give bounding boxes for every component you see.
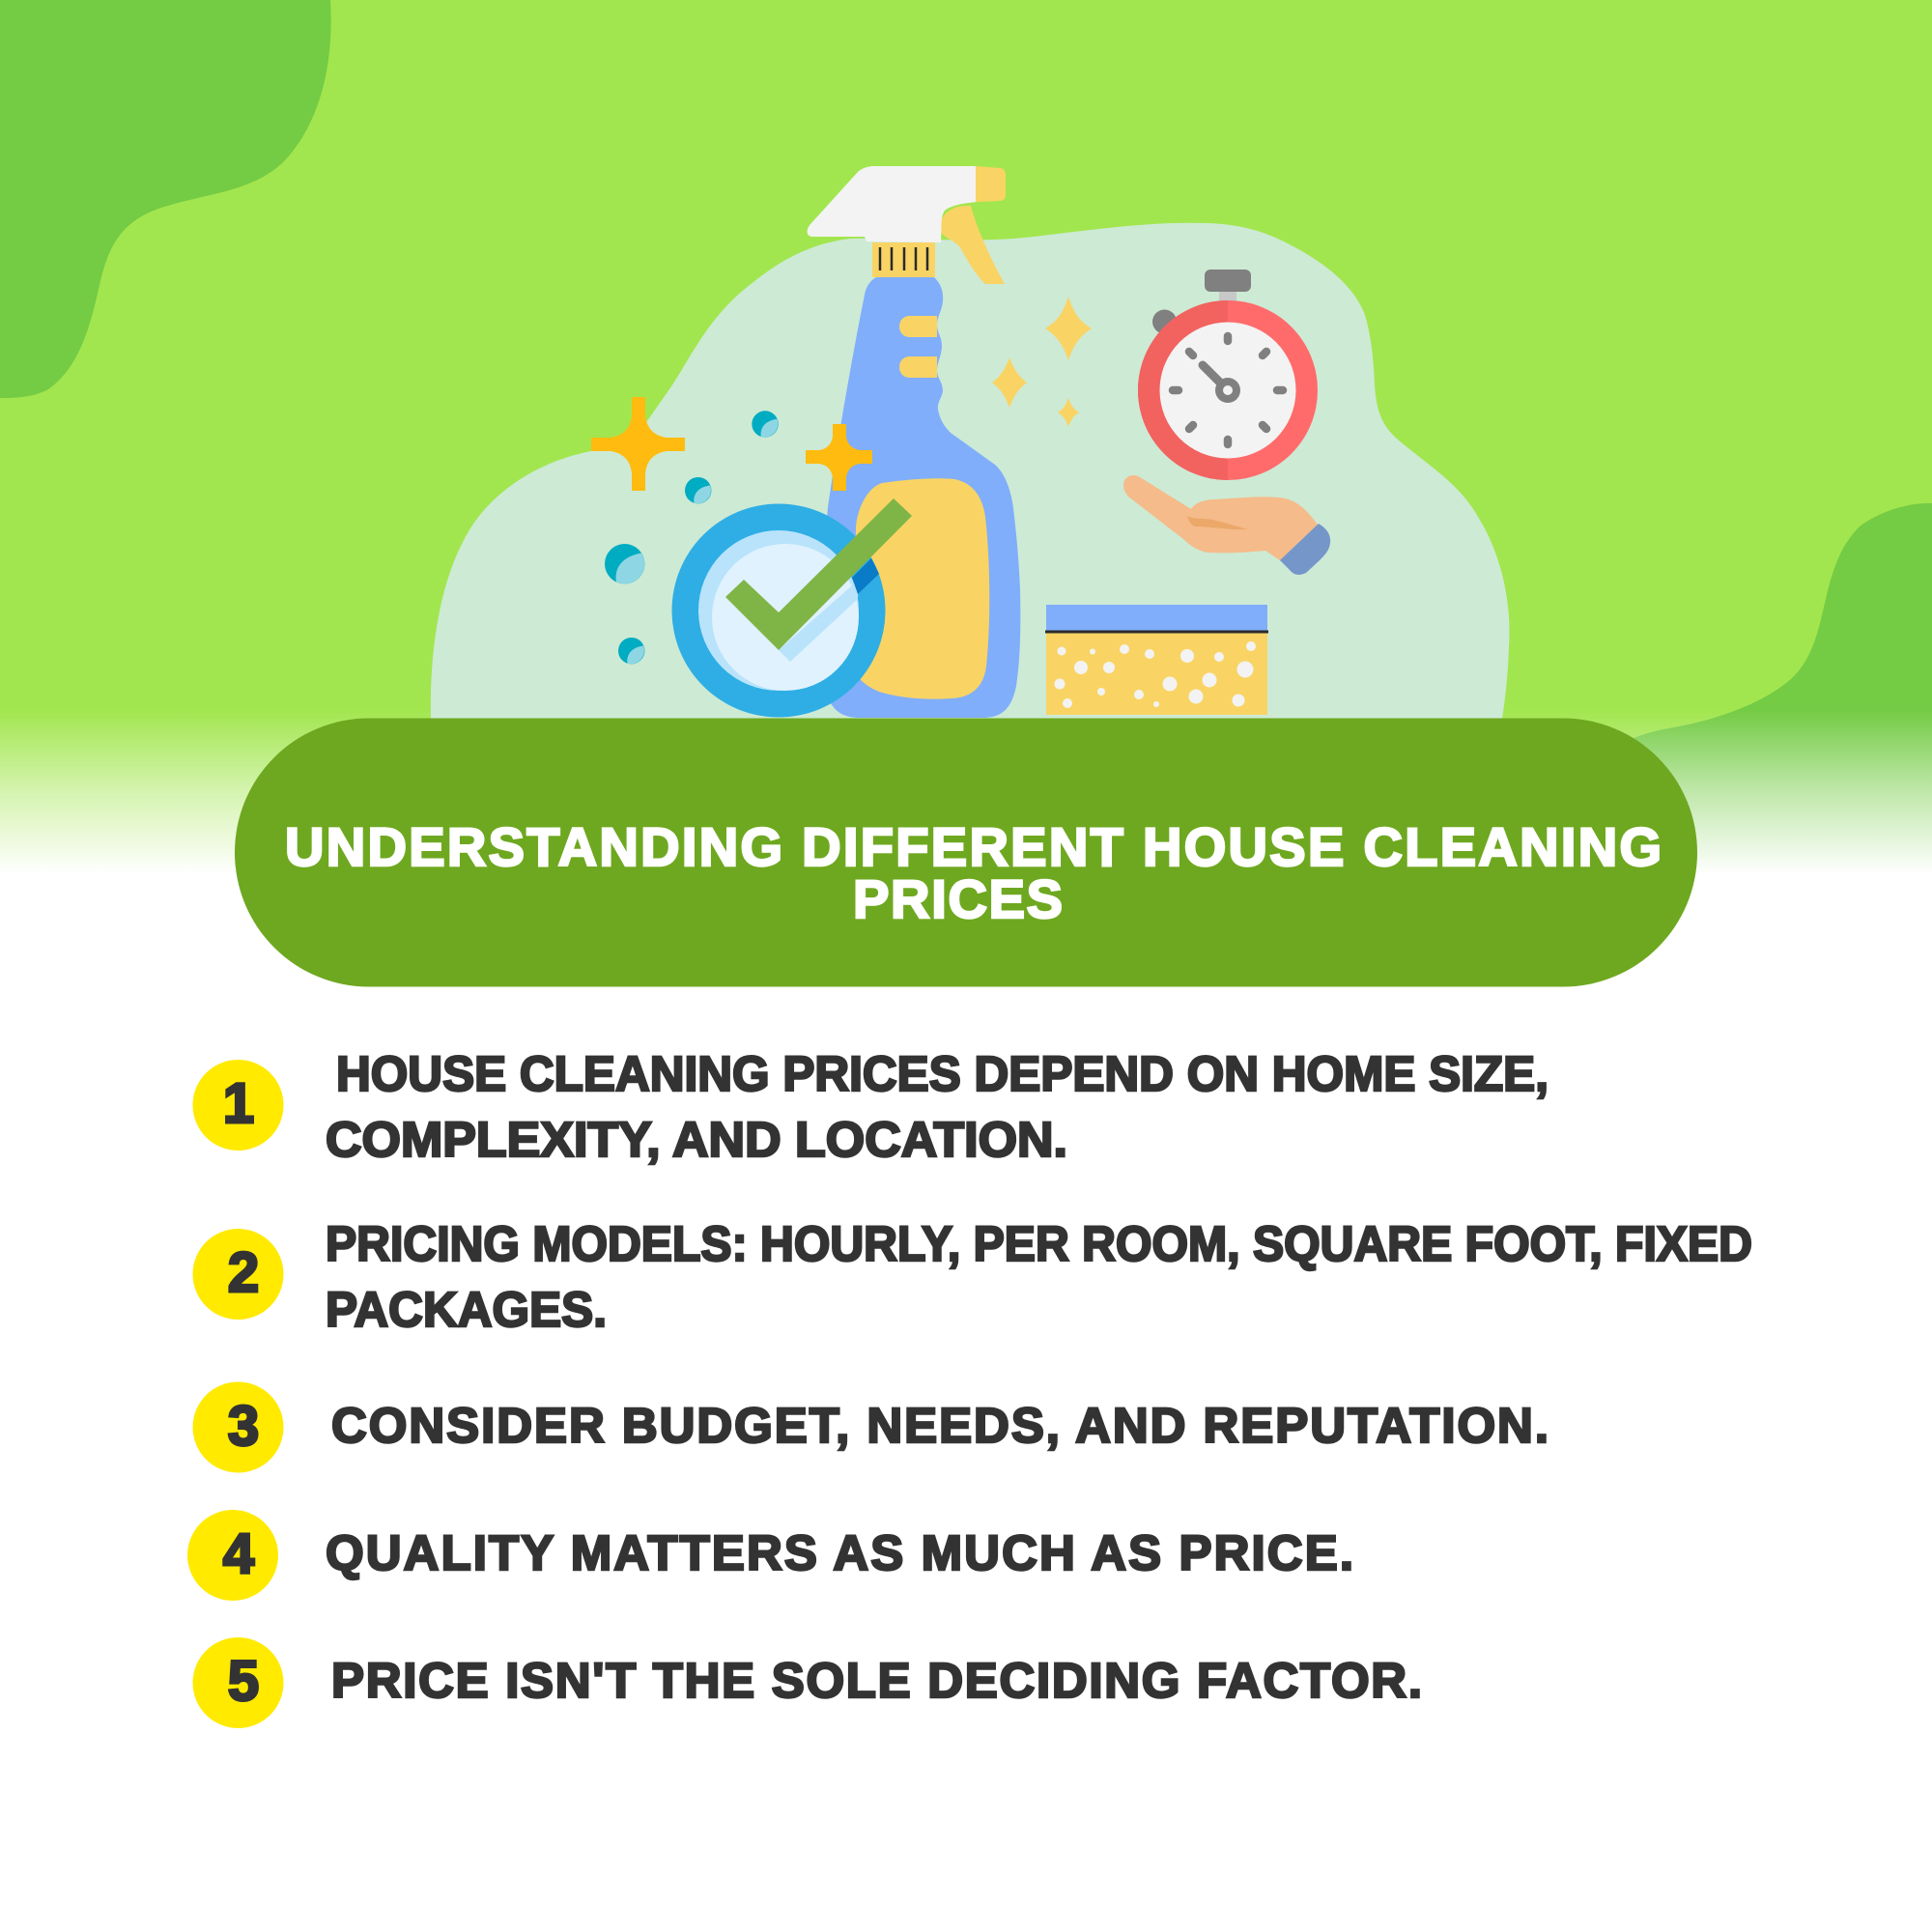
title line 2: PRICES [853,868,1063,929]
tick marks [1173,336,1283,444]
sparkle: yellow medium [992,357,1027,408]
spray nozzle [976,166,1006,202]
badge inner disc [698,530,859,691]
crown [1219,290,1236,303]
number badge 2 [193,1229,284,1320]
sponge holes [1055,641,1256,708]
side button [1152,309,1177,334]
number badge 3 [193,1381,284,1472]
bubble 1 [752,411,779,438]
spray head [808,166,978,242]
case [1138,300,1318,480]
sparkle: large orange [591,397,685,491]
list item 1 [193,1046,1548,1167]
dial [1159,323,1296,458]
number badge 5 [193,1637,284,1728]
icon: stopwatch [1138,270,1318,480]
number badge 1 [193,1060,284,1151]
numeral 4: 4 [223,1522,254,1585]
bubble 4 [618,638,644,664]
sparkle: yellow small [1058,398,1079,427]
numeral 2: 2 [228,1241,259,1304]
title line 1: UNDERSTANDING DIFFERENT HOUSE CLEANING [285,816,1662,877]
clock hand [1203,365,1228,390]
bottle body [826,277,1020,718]
badge ring [672,504,885,717]
background fade to white [0,710,1932,874]
item 5 text: PRICE ISN'T THE SOLE DECIDING FACTOR. [331,1653,1422,1708]
sponge top layer [1046,605,1267,632]
item 3 text: CONSIDER BUDGET, NEEDS, AND REPUTATION. [331,1398,1548,1453]
list item 2 [193,1216,1752,1337]
bottle collar [872,242,935,277]
numeral 5: 5 [228,1650,259,1713]
number badge 4 [187,1510,278,1601]
background: green field [0,0,1932,908]
bubble 2 [685,477,711,503]
banner pill [235,719,1697,987]
bubble 3 [605,544,644,583]
item 2 text line 1: PRICING MODELS: HOURLY, PER ROOM, SQUARE FOOT, FIXED [326,1216,1752,1271]
background blob: right [1623,503,1932,908]
numeral 1: 1 [223,1072,254,1135]
list item 4 [187,1510,1353,1601]
title banner [235,719,1697,987]
icon: open hand [1123,475,1330,575]
palm crease [1187,516,1248,529]
background blob: top left [0,0,331,398]
bottle trigger [941,206,1005,284]
item 1 text line 1: HOUSE CLEANING PRICES DEPEND ON HOME SIZE, [336,1046,1548,1101]
check shadow [779,580,859,662]
sparkle: yellow large [1045,297,1092,360]
cuff [1280,524,1330,575]
pale blob behind illustration [431,223,1510,719]
palm [1123,475,1318,560]
icon: check badge [672,498,912,717]
illustration: spray bottle [808,166,1020,718]
sponge body [1046,633,1267,715]
bottle label [854,478,989,699]
check mark [725,498,912,650]
bottle grip bars [899,316,937,337]
sparkle: small orange [806,424,872,491]
item 1 text line 2: COMPLEXITY, AND LOCATION. [326,1112,1067,1167]
list item 5 [193,1637,1422,1728]
item 2 text line 2: PACKAGES. [326,1282,607,1337]
icon: sponge [1045,605,1268,715]
numeral 3: 3 [228,1395,259,1458]
list item 3 [193,1381,1548,1472]
item 4 text: QUALITY MATTERS AS MUCH AS PRICE. [326,1525,1353,1580]
